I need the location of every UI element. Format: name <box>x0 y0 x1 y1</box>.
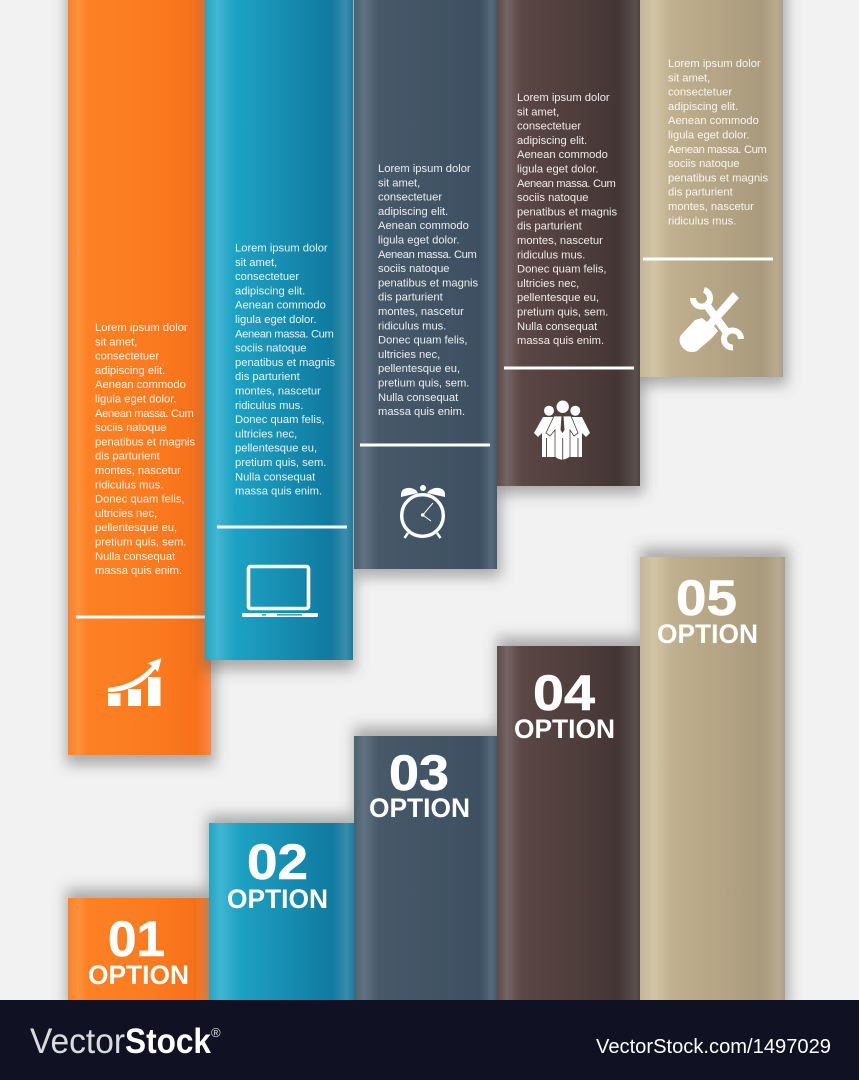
text block: blue column: Lorem ipsum dolor <box>235 242 328 254</box>
panel: option 03 lower tab: 03 <box>389 745 449 801</box>
text block: slate column: Donec quam felis, <box>378 335 468 347</box>
text block: tan column: Aenean commodo <box>668 115 759 127</box>
text block: brown column: pretium quis, sem. <box>517 307 608 319</box>
panel: option 05 lower tab: OPTION <box>657 619 758 649</box>
text block: brown column: Donec quam felis, <box>517 264 607 276</box>
text block: brown column: massa quis enim. <box>517 335 604 347</box>
text block: brown column: sit amet, <box>517 106 559 118</box>
text block: brown column: dis parturient <box>517 221 583 233</box>
panel: option 02 lower tab: OPTION <box>227 884 328 914</box>
text block: orange column: sit amet, <box>95 336 137 348</box>
logo: VectorStock: Vector <box>30 1022 125 1061</box>
text block: orange column: pretium quis, sem. <box>95 536 186 548</box>
text block: slate column: Nulla consequat <box>378 392 459 404</box>
text block: brown column: Nulla consequat <box>517 321 598 333</box>
text block: blue column: Nulla consequat <box>235 471 316 483</box>
text block: tan column: Aenean massa. Cum <box>668 144 767 156</box>
panel: tan upper column <box>640 0 783 377</box>
panel: orange upper column <box>66 0 215 765</box>
panel: slate upper column <box>354 0 497 569</box>
text block: orange column: penatibus et magnis <box>95 436 196 448</box>
text block: brown column: ligula eget dolor. <box>517 164 598 176</box>
text block: blue column: sit amet, <box>235 257 277 269</box>
panel: option 03 lower tab <box>354 736 497 1000</box>
text block: slate column: Lorem ipsum dolor <box>378 163 471 175</box>
text block: slate column: massa quis enim. <box>378 406 465 418</box>
text block: orange column: Aenean massa. Cum <box>95 408 194 420</box>
text block: slate column: Aenean massa. Cum <box>378 249 477 261</box>
text block: slate column: montes, nascetur <box>378 306 464 318</box>
text block: tan column: Lorem ipsum dolor <box>668 58 761 70</box>
text block: orange column: ridiculus mus. <box>95 479 163 491</box>
text block: brown column: ultricies nec, <box>517 278 579 290</box>
text block: tan column: ligula eget dolor. <box>668 130 749 142</box>
panel: option 03 lower tab: OPTION <box>369 793 470 823</box>
text block: brown column: pellentesque eu, <box>517 292 599 304</box>
text block: tan column: sit amet, <box>668 72 710 84</box>
panel: option 04 lower tab <box>497 646 640 1000</box>
text block: slate column: consectetuer <box>378 192 442 204</box>
text block: blue column: pellentesque eu, <box>235 443 317 455</box>
panel: option 01 lower tab: OPTION <box>88 960 189 990</box>
text block: brown column: ridiculus mus. <box>517 249 585 261</box>
panel: option 01 lower tab <box>68 898 209 1000</box>
text block: blue column: massa quis enim. <box>235 486 322 498</box>
text block: blue column: ridiculus mus. <box>235 400 303 412</box>
text block: slate column: ridiculus mus. <box>378 320 446 332</box>
panel: option 02 lower tab: 02 <box>247 834 308 890</box>
text block: blue column: sociis natoque <box>235 343 307 355</box>
text block: orange column: massa quis enim. <box>95 565 182 577</box>
text block: blue column: Aenean commodo <box>235 300 326 312</box>
text block: brown column: consectetuer <box>517 121 581 133</box>
text block: brown column: penatibus et magnis <box>517 206 618 218</box>
text block: blue column: dis parturient <box>235 371 301 383</box>
icon: rising bar chart <box>108 658 162 706</box>
text block: blue column: ultricies nec, <box>235 428 297 440</box>
text block: orange column: Nulla consequat <box>95 551 176 563</box>
text block: orange column: sociis natoque <box>95 422 167 434</box>
text block: slate column: dis parturient <box>378 292 444 304</box>
text block: brown column: sociis natoque <box>517 192 589 204</box>
text block: brown column: montes, nascetur <box>517 235 603 247</box>
text block: orange column: Aenean commodo <box>95 379 186 391</box>
icon: alarm clock <box>401 485 445 538</box>
text block: tan column: montes, nascetur <box>668 201 754 213</box>
text block: blue column: Donec quam felis, <box>235 414 325 426</box>
text block: slate column: sociis natoque <box>378 263 450 275</box>
panel: option 04 lower tab: 04 <box>533 665 595 721</box>
text block: orange column: ultricies nec, <box>95 508 157 520</box>
text block: slate column: ultricies nec, <box>378 349 440 361</box>
text block: brown column: adipiscing elit. <box>517 135 587 147</box>
text block: orange column: Donec quam felis, <box>95 494 185 506</box>
text block: blue column: penatibus et magnis <box>235 357 336 369</box>
panel: brown upper column <box>497 0 640 486</box>
text block: orange column: consectetuer <box>95 351 159 363</box>
text block: blue column: consectetuer <box>235 271 299 283</box>
text block: blue column: adipiscing elit. <box>235 285 305 297</box>
text block: blue column: pretium quis, sem. <box>235 457 326 469</box>
text block: blue column: Aenean massa. Cum <box>235 328 334 340</box>
text block: slate column: pretium quis, sem. <box>378 378 469 390</box>
text block: slate column: penatibus et magnis <box>378 277 479 289</box>
logo: VectorStock <box>30 1022 221 1061</box>
text block: tan column: penatibus et magnis <box>668 172 769 184</box>
text block: slate column: ligula eget dolor. <box>378 234 459 246</box>
text block: blue column: ligula eget dolor. <box>235 314 316 326</box>
panel: option 05 lower tab <box>640 557 785 1000</box>
panel: blue upper column <box>203 0 355 670</box>
icon: laptop <box>242 566 318 617</box>
text block: brown column: Aenean commodo <box>517 149 608 161</box>
panel: option 05 lower tab: 05 <box>676 570 737 626</box>
footer image reference: VectorStock.com/1497029 <box>596 1036 831 1058</box>
panel: option 02 lower tab <box>207 815 354 1010</box>
text block: orange column: pellentesque eu, <box>95 522 177 534</box>
text block: orange column: Lorem ipsum dolor <box>95 322 188 334</box>
logo: VectorStock: Stock <box>125 1022 211 1061</box>
panel: option 04 lower tab: OPTION <box>514 714 615 744</box>
panel: option 01 lower tab: 01 <box>108 911 165 967</box>
text block: tan column: dis parturient <box>668 187 734 199</box>
text block: brown column: Aenean massa. Cum <box>517 178 616 190</box>
text block: tan column: consectetuer <box>668 87 732 99</box>
text block: tan column: sociis natoque <box>668 158 740 170</box>
text block: brown column: Lorem ipsum dolor <box>517 92 610 104</box>
text block: orange column: montes, nascetur <box>95 465 181 477</box>
text block: blue column: montes, nascetur <box>235 386 321 398</box>
text block: orange column: dis parturient <box>95 451 161 463</box>
logo: VectorStock: ® <box>211 1025 221 1040</box>
text block: tan column: ridiculus mus. <box>668 215 736 227</box>
text block: slate column: sit amet, <box>378 177 420 189</box>
icon: crossed wrench and screwdriver <box>680 290 741 352</box>
icon: group of people <box>534 400 590 460</box>
text block: slate column: Aenean commodo <box>378 220 469 232</box>
text block: slate column: pellentesque eu, <box>378 363 460 375</box>
text block: slate column: adipiscing elit. <box>378 206 448 218</box>
text block: tan column: adipiscing elit. <box>668 101 738 113</box>
footer bar <box>0 1000 859 1080</box>
text block: orange column: ligula eget dolor. <box>95 394 176 406</box>
text block: orange column: adipiscing elit. <box>95 365 165 377</box>
